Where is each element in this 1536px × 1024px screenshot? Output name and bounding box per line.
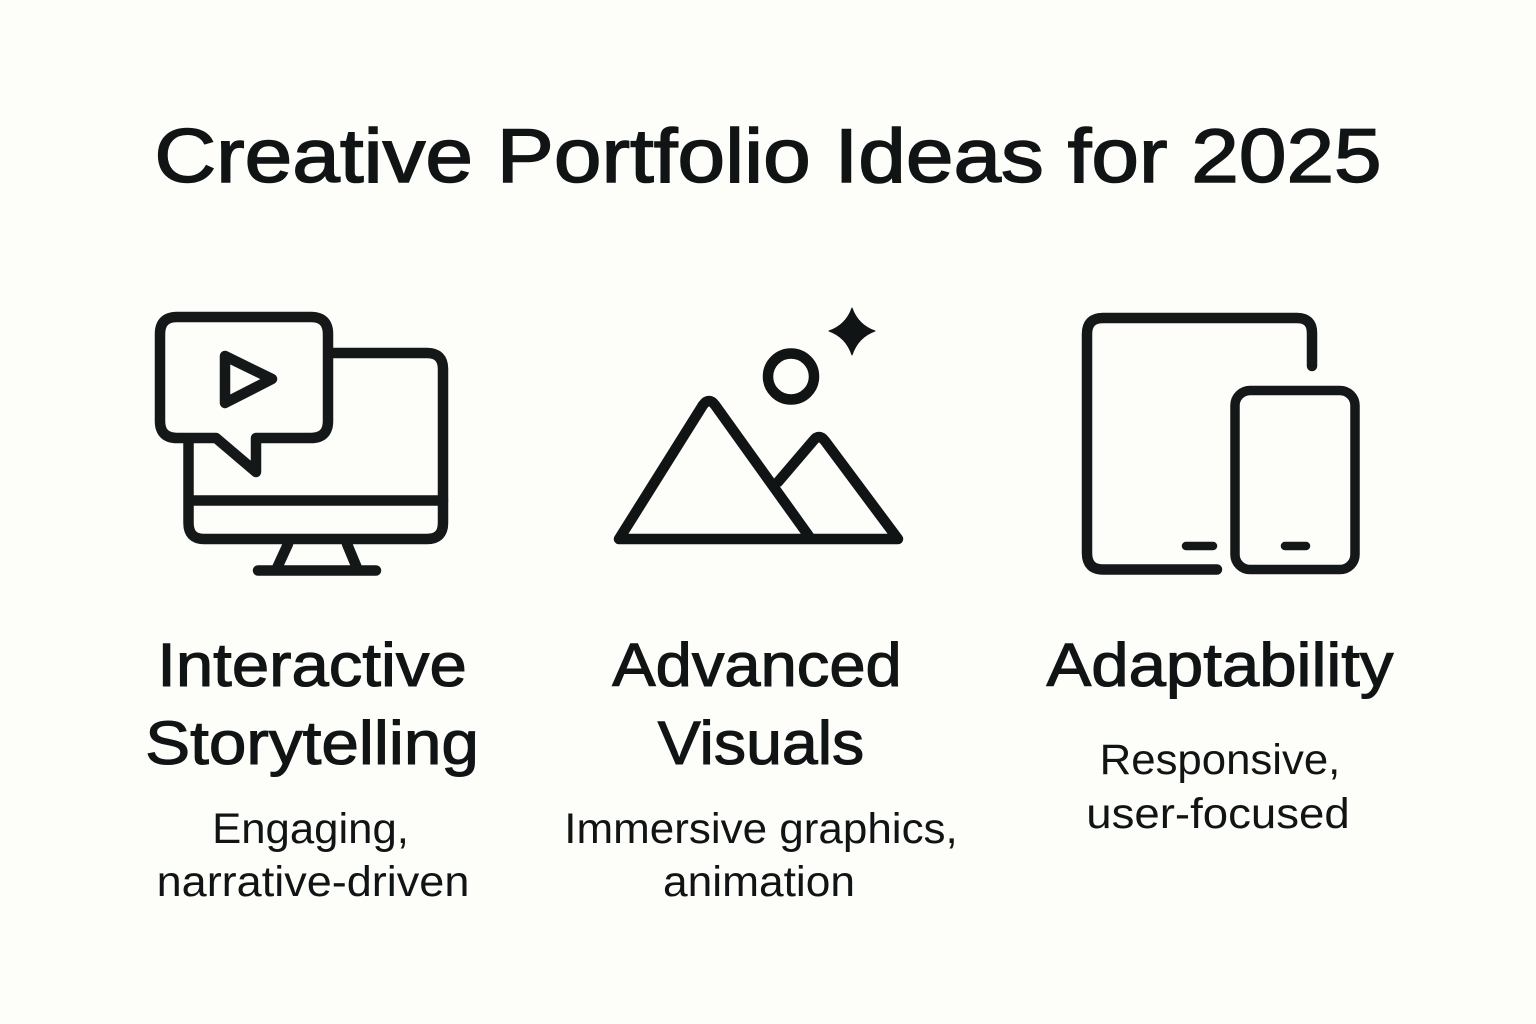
heading: Interactive [157,631,467,699]
heading [145,631,479,777]
description [157,805,469,906]
description: Responsive, [1100,736,1340,784]
description [564,805,958,906]
description: user-focused [1086,790,1350,838]
description: animation [663,858,855,906]
description: narrative-driven [157,858,469,906]
description: Immersive graphics, [564,805,958,853]
panel: interactive storytelling [145,631,479,906]
icon: tablet and phone [1082,312,1360,575]
heading: Adaptability [1046,631,1393,699]
description: Engaging, [212,805,409,853]
heading [612,631,902,777]
description [1086,736,1350,838]
heading: Advanced [612,631,902,699]
panel: adaptability [1046,631,1394,838]
icon: mountains with sun and star [614,308,904,544]
icon: monitor with video speech bubble [154,312,448,576]
title: Creative Portfolio Ideas for 2025 [154,114,1381,199]
heading: Visuals [658,709,864,777]
heading: Storytelling [145,709,479,777]
panel: advanced visuals [564,631,958,906]
